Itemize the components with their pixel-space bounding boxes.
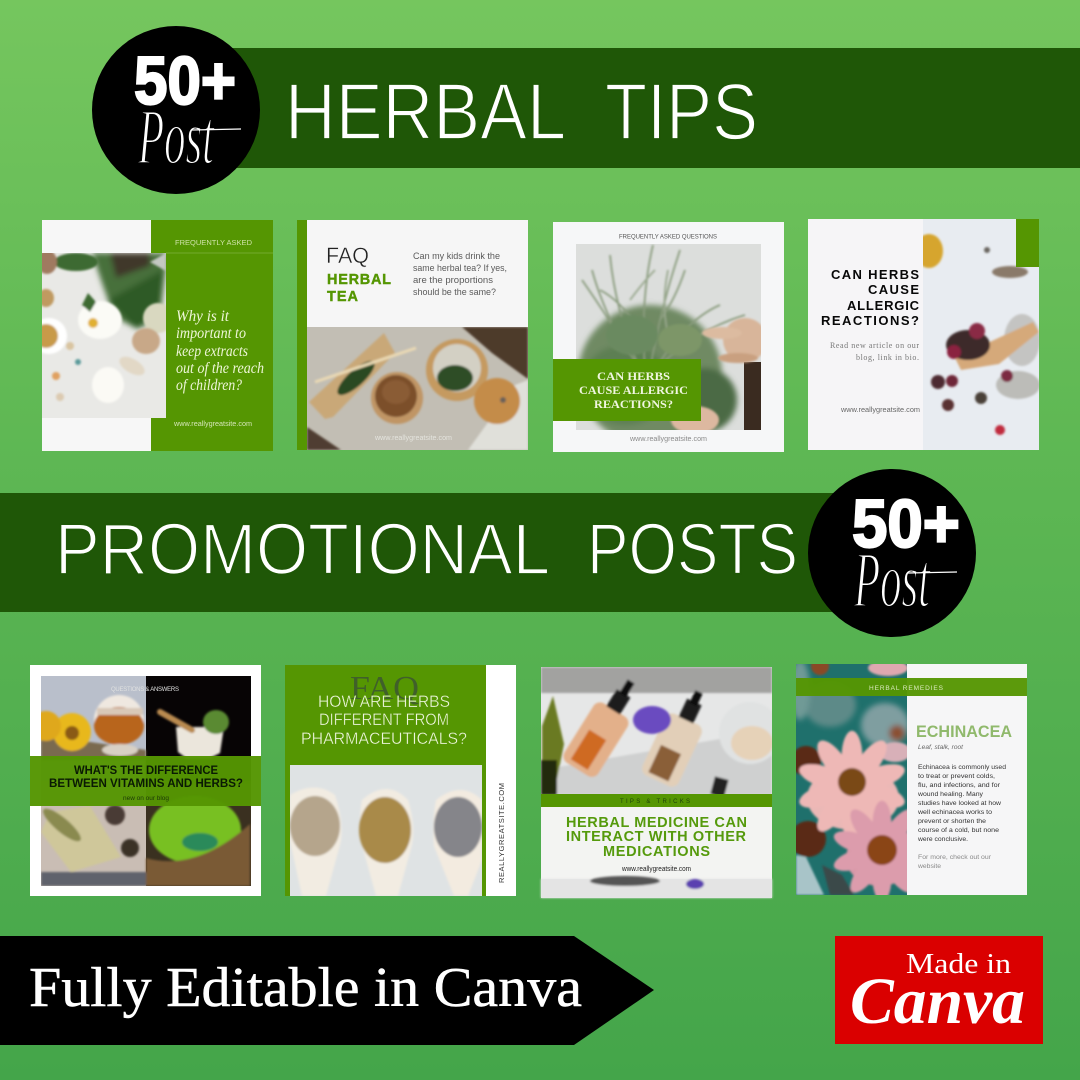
question text: same herbal tea? If yes, <box>413 263 507 274</box>
description paragraph: studies have looked at how <box>918 800 1001 807</box>
photo: three wooden spoons <box>290 765 482 896</box>
card: herbal medicine interactions <box>541 667 781 898</box>
green band: herbal remedies <box>796 678 1027 696</box>
closing note: website <box>917 863 941 870</box>
vertical website label: REALLYGREATSITE.COM <box>497 783 506 883</box>
heading: herbal tips <box>285 67 758 156</box>
description paragraph: well echinacea works to <box>917 809 992 816</box>
photo: herbs and hand <box>576 244 761 430</box>
question text: are the proportions <box>413 275 493 286</box>
description paragraph: to treat or prevent colds, <box>918 773 995 780</box>
description paragraph <box>917 764 1006 843</box>
heading: REACTIONS? <box>821 313 919 328</box>
heading <box>821 267 920 328</box>
banner: herbal tips <box>210 48 1080 168</box>
arrow banner: fully editable in canva <box>0 936 654 1045</box>
heading: promotional posts: PROMOTIONAL <box>55 510 550 590</box>
website: www.reallygreatsite.com <box>374 435 452 442</box>
green corner block <box>1016 219 1039 267</box>
closing note <box>917 854 992 870</box>
website: www.reallygreatsite.com <box>629 436 707 443</box>
question text: out of the reach <box>176 360 264 377</box>
card: vitamins and herbs <box>30 665 261 896</box>
badge count: 50+ <box>852 486 960 562</box>
badge count: 50+ <box>134 43 236 119</box>
white text panel <box>541 807 772 879</box>
badge: made in canva: Made in <box>906 949 1011 980</box>
heading: herbal tips: TIPS <box>605 67 758 156</box>
photo collage <box>31 676 251 886</box>
faq heading: FAQ <box>326 243 369 268</box>
blog note: blog, link in bio. <box>856 353 919 362</box>
description paragraph: flu, and infections, and for <box>918 782 1001 789</box>
green band with heading <box>30 756 261 806</box>
heading: CAUSE <box>868 282 919 297</box>
question text: of children? <box>176 377 242 394</box>
card: can herbs cause allergic reactions blog <box>808 219 1040 450</box>
description paragraph: course of a cold, but none <box>918 827 999 834</box>
card: can herbs cause allergic reactions photo <box>553 222 784 452</box>
question text <box>413 251 507 298</box>
question heading <box>301 692 467 748</box>
website: www.reallygreatsite.com <box>173 421 252 428</box>
green band with heading: WHAT'S THE DIFFERENCE <box>74 765 218 777</box>
badge: made in canva <box>835 936 1043 1044</box>
green question box <box>553 359 701 421</box>
badge script label: Post <box>137 93 215 180</box>
photo: echinacea flowers <box>796 664 907 895</box>
card: why is it important <box>31 220 273 451</box>
description paragraph: wound healing. Many <box>917 791 984 798</box>
heading: echinacea: ECHINACEA <box>916 722 1012 741</box>
green question box: CAN HERBS <box>597 369 670 383</box>
card: echinacea <box>790 657 1027 901</box>
white text panel: HERBAL MEDICINE CAN <box>566 815 747 831</box>
description paragraph: Echinacea is commonly used <box>918 764 1006 771</box>
green band with heading: BETWEEN VITAMINS AND HERBS? <box>49 778 243 790</box>
heading: promotional posts: POSTS <box>587 510 798 590</box>
heading: herbal tips: HERBAL <box>285 67 566 156</box>
subtitle: Leaf, stalk, root <box>918 744 964 751</box>
question text <box>176 308 264 394</box>
badge script label: Post <box>853 536 931 623</box>
white text panel: www.reallygreatsite.com <box>621 866 691 873</box>
photo: tea bowls <box>307 327 528 450</box>
herbal tea heading <box>327 272 391 305</box>
website: www.reallygreatsite.com <box>840 407 920 414</box>
description paragraph: were conclusive. <box>917 836 968 843</box>
green band: tips and tricks <box>541 794 772 807</box>
card: faq herbal tea <box>297 220 528 450</box>
photo: white flowers and herbs <box>42 253 166 418</box>
blog note: Read new article on our <box>830 341 919 350</box>
badge: 50+ post top <box>92 26 260 194</box>
heading: CAN HERBS <box>831 267 919 282</box>
question heading: PHARMACEUTICALS? <box>301 729 467 748</box>
blog note <box>830 341 919 362</box>
question heading: HOW ARE HERBS <box>318 692 450 711</box>
green question box: CAUSE ALLERGIC <box>579 383 688 397</box>
closing note: For more, check out our <box>918 854 992 861</box>
photo: dropper bottles <box>541 667 781 797</box>
question text: important to <box>176 325 246 342</box>
green band: tips and tricks: TIPS & TRICKS <box>620 799 690 805</box>
badge: made in canva: Canva <box>850 965 1025 1038</box>
arrow banner: fully editable in canva: Fully Editable in Canva <box>29 957 582 1019</box>
question text: should be the same? <box>413 287 496 298</box>
question text: Can my kids drink the <box>413 251 500 262</box>
heading: ALLERGIC <box>847 298 920 313</box>
question text: Why is it <box>176 308 230 325</box>
herbal tea heading: TEA <box>327 289 359 305</box>
badge: 50+ post middle <box>808 469 976 637</box>
green band: herbal remedies: HERBAL REMEDIES <box>869 685 944 692</box>
description paragraph: prevent or shorten the <box>918 818 986 825</box>
faq ghost heading: FAQ <box>350 670 419 707</box>
green question box: REACTIONS? <box>594 397 673 411</box>
label: frequently asked: FREQUENTLY ASKED <box>175 238 253 247</box>
question text: keep extracts <box>176 343 248 360</box>
question heading: DIFFERENT FROM <box>319 710 449 729</box>
white text panel: MEDICATIONS <box>603 844 710 860</box>
green band with heading: new on our blog <box>123 795 169 802</box>
herbal tea heading: HERBAL <box>327 272 391 288</box>
label: questions and answers: QUESTIONS & ANSWERS <box>111 687 179 693</box>
label: frequently asked questions: FREQUENTLY ASKED QUESTIONS <box>619 234 717 240</box>
card: herbs vs pharmaceuticals <box>285 665 516 896</box>
photo: dried roses in wooden scoop <box>915 219 1040 450</box>
photo strip at bottom <box>541 876 772 898</box>
banner: promotional posts <box>0 493 860 612</box>
white text panel: INTERACT WITH OTHER <box>566 829 747 845</box>
